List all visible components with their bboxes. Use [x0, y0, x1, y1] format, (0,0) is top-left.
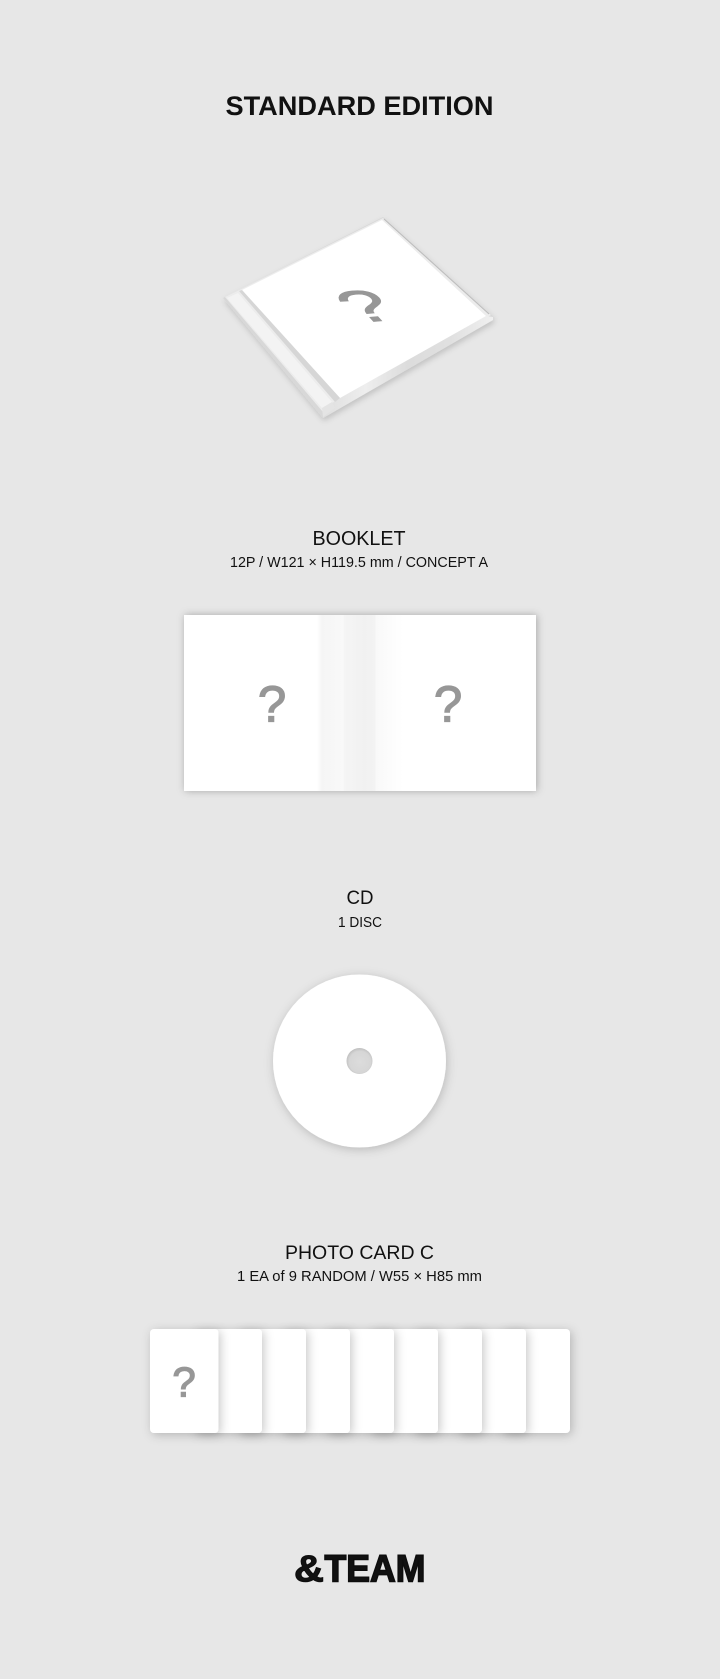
heading: CD: [338, 888, 382, 931]
product image: CD disc: [273, 974, 446, 1148]
card 1: [150, 1329, 218, 1433]
product image: stack of nine photo cards: [150, 1329, 570, 1433]
card 5: [326, 1329, 394, 1433]
heading: booklet: 12P / W121 × H119.5 mm / CONCEPT A: [230, 554, 488, 571]
title: STANDARD EDITION: [226, 91, 494, 121]
case clear top rim: [225, 218, 491, 412]
logo: &: [294, 1548, 324, 1590]
cover insert: [242, 220, 486, 398]
heading: CD: 1 DISC: [338, 915, 382, 931]
spine channel: [239, 290, 340, 402]
product image: booklet: [184, 615, 536, 791]
disc centre hole: [346, 1048, 372, 1074]
heading: photo card: 1 EA of 9 RANDOM / W55 × H85 mm: [237, 1269, 482, 1285]
spine end cap: [322, 402, 335, 417]
heading: CD: CD: [346, 888, 374, 909]
icon: question mark right: ?: [434, 676, 462, 732]
logo: TEAM: [324, 1548, 426, 1590]
booklet fold highlight: [317, 615, 403, 791]
case front edge: [323, 316, 493, 418]
icon: skewed question mark: ?: [322, 280, 410, 332]
spine strip: [227, 293, 332, 408]
booklet page: [184, 615, 536, 791]
card 6: [370, 1329, 438, 1433]
card 9: [502, 1329, 570, 1433]
card 8: [458, 1329, 526, 1433]
case right rim line: [384, 219, 489, 314]
card 4: [282, 1329, 350, 1433]
icon: question mark left: ?: [258, 676, 286, 732]
disc: [273, 974, 446, 1148]
icon: question mark on first card: ?: [172, 1358, 196, 1406]
card 2: [194, 1329, 262, 1433]
card 7: [414, 1329, 482, 1433]
heading: photo card: [237, 1243, 482, 1285]
product image: CD jewel case: [223, 217, 493, 418]
heading: booklet: BOOKLET: [312, 528, 406, 550]
heading: photo card: PHOTO CARD C: [285, 1243, 434, 1264]
heading: booklet: [230, 528, 488, 571]
card 3: [238, 1329, 306, 1433]
case body: [223, 217, 493, 418]
